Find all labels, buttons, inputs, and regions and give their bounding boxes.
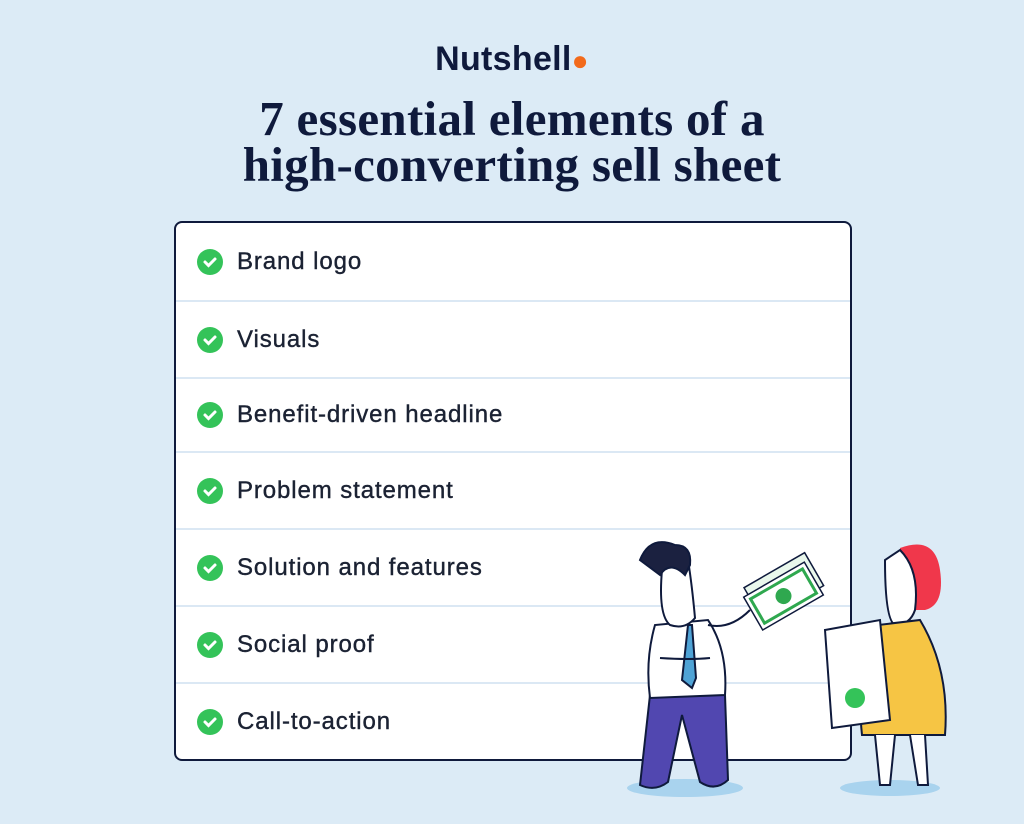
panel: checklist (174, 221, 852, 761)
illustration: two people (627, 541, 947, 797)
item 7: Call-to-action (237, 708, 391, 734)
item 4 (176, 453, 850, 530)
item 1 (176, 223, 850, 302)
item 5: Solution and features (237, 554, 483, 580)
item 2: Visuals (237, 326, 320, 352)
title: 7 essential elements of a (259, 91, 765, 146)
item 3: Benefit-driven headline (237, 401, 503, 428)
logo: Nutshell● (435, 40, 589, 78)
item 6 (176, 607, 850, 684)
item 5 (176, 530, 850, 607)
item 3 (176, 379, 850, 453)
item 1: Brand logo (237, 248, 362, 274)
title: high-converting sell sheet (243, 137, 781, 192)
item 6: Social proof (237, 630, 375, 658)
woman (825, 544, 946, 796)
item 4: Problem statement (237, 476, 454, 504)
man (627, 542, 750, 797)
title (243, 91, 781, 192)
item 2 (176, 302, 850, 379)
money (740, 553, 828, 630)
